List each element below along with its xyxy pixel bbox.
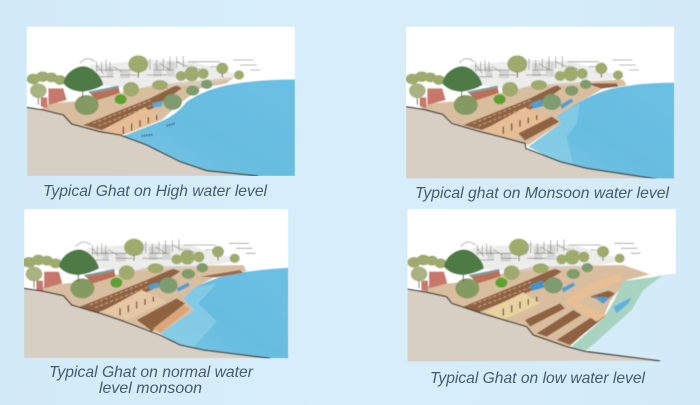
caption: Typical ghat on Monsoon water level [415,185,669,202]
panel: monsoon water level [406,27,674,202]
caption: level monsoon [99,380,202,397]
caption: Typical Ghat on normal water [49,364,254,381]
illustration: ghat on low water level [407,209,676,362]
caption: Typical Ghat on low water level [430,370,645,387]
panel: normal water level monsoon [22,209,288,397]
caption [49,364,254,397]
illustration: ghat on high water level [27,27,295,176]
panel: low water level [407,209,676,387]
illustration: ghat on normal monsoon water level [22,209,288,358]
illustration: ghat on monsoon water level [406,27,674,179]
caption: Typical Ghat on High water level [43,183,267,200]
panel: high water level [27,27,295,200]
